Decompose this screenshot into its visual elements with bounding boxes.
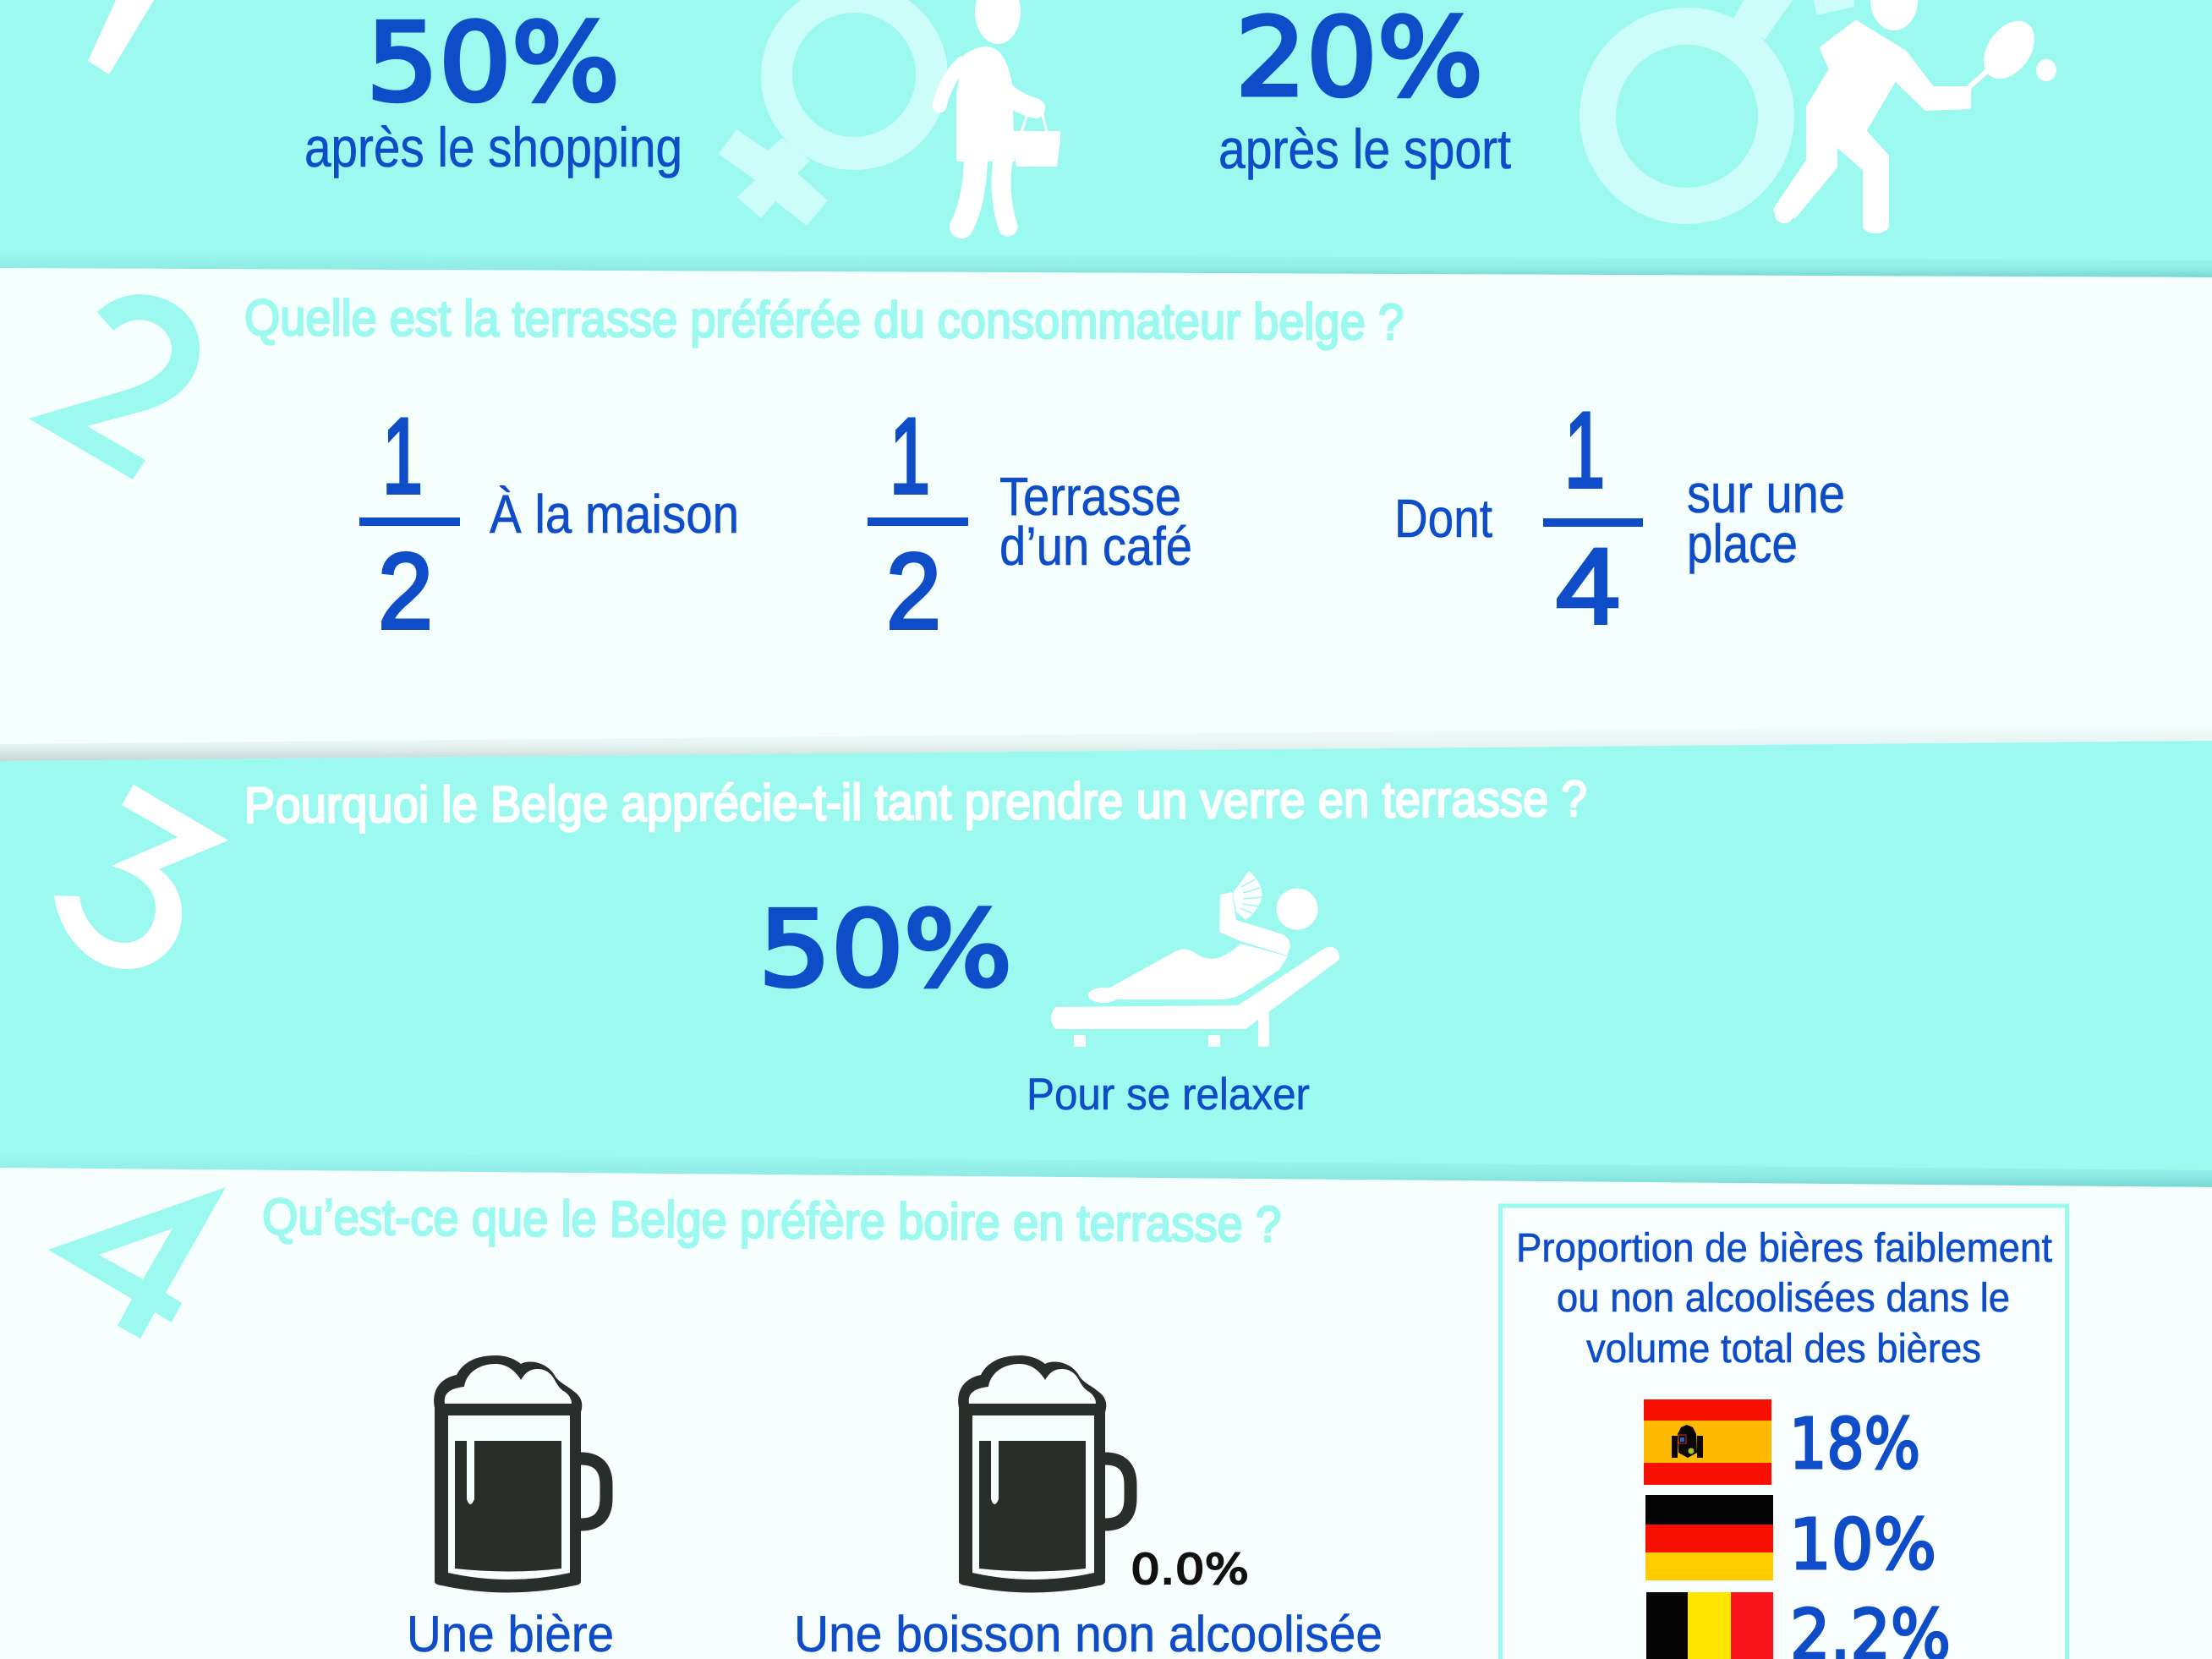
icon: male symbol xyxy=(1580,0,1854,224)
stat: 20% after sport xyxy=(1218,0,1511,180)
fraction: one half at home xyxy=(359,396,739,651)
fraction: one half cafe terrace: Terrasse xyxy=(999,466,1181,527)
fraction: one half cafe terrace xyxy=(868,396,1192,651)
stat: Spain 18%: 18% xyxy=(1789,1404,1920,1485)
panel: section 2, favourite terrace xyxy=(0,268,2212,761)
section number 2 xyxy=(29,294,200,479)
heading: section 3 question: Pourquoi le Belge apprécie-t-il tant prendre un verre en terrasse ? xyxy=(244,770,1587,834)
stat: 50% after shopping xyxy=(304,0,682,178)
stat: 20% after sport: après le sport xyxy=(1218,118,1511,180)
fraction: one quarter on a square: 1 xyxy=(1564,390,1605,510)
flag: Spain xyxy=(1644,1399,1771,1485)
fraction: one quarter on a square: 4 xyxy=(1556,526,1620,646)
flag: Germany xyxy=(1645,1495,1773,1580)
callout text: Proportion de bières faiblement xyxy=(1516,1226,2052,1271)
icon: tennis player xyxy=(1775,0,2056,233)
stat: 50% after shopping: 50% xyxy=(366,0,620,125)
icon: beer mug, non alcoholic xyxy=(958,1355,1131,1593)
callout text: ou non alcoolisées dans le xyxy=(1557,1276,2010,1321)
panel: section 4, preferred terrace drink xyxy=(0,1168,2212,1659)
fraction: one half at home: 2 xyxy=(378,531,433,651)
stat: 50% after shopping: après le shopping xyxy=(304,116,682,178)
stat: 50% to relax: 50% xyxy=(758,890,1012,1010)
section number 3 xyxy=(54,785,228,969)
panel: section 3, why terrace xyxy=(0,741,2212,1187)
panel: section 1, after which activity xyxy=(0,0,2212,277)
section number 1 xyxy=(88,0,154,74)
fraction: one quarter on a square xyxy=(1394,390,1845,646)
icon: female symbol xyxy=(719,0,948,226)
fraction: one quarter on a square: sur une xyxy=(1687,463,1845,524)
heading: section 2 question: Quelle est la terrasse préférée du consommateur belge ? xyxy=(244,289,1404,350)
section number 4 xyxy=(48,1187,226,1339)
icon: woman shopping xyxy=(939,0,1060,227)
callout text: volume total des bières xyxy=(1586,1327,1981,1372)
stat: Germany 10%: 10% xyxy=(1789,1505,1936,1585)
label: 0.0%: 0.0% xyxy=(1131,1546,1249,1594)
fraction: one quarter on a square: Dont xyxy=(1394,488,1492,549)
icon: person on sun lounger with fan xyxy=(1051,871,1339,1047)
flag: Belgium xyxy=(1646,1592,1773,1659)
heading: section 4 question: Qu’est-ce que le Belge préfère boire en terrasse ? xyxy=(262,1188,1281,1252)
callout: low-alcohol beer share by country xyxy=(1500,1206,2067,1659)
callout text xyxy=(1516,1226,2052,1372)
label: to relax: Pour se relaxer xyxy=(1027,1070,1310,1120)
fraction: one half at home: 1 xyxy=(382,396,423,516)
fraction: one quarter on a square: place xyxy=(1687,513,1798,574)
fraction: one half cafe terrace: 1 xyxy=(890,396,930,516)
icon: beer mug xyxy=(434,1355,606,1593)
fraction: one half at home: À la maison xyxy=(490,484,739,545)
fraction: one half cafe terrace: d’un café xyxy=(999,516,1192,577)
fraction: one half cafe terrace: 2 xyxy=(886,531,941,651)
